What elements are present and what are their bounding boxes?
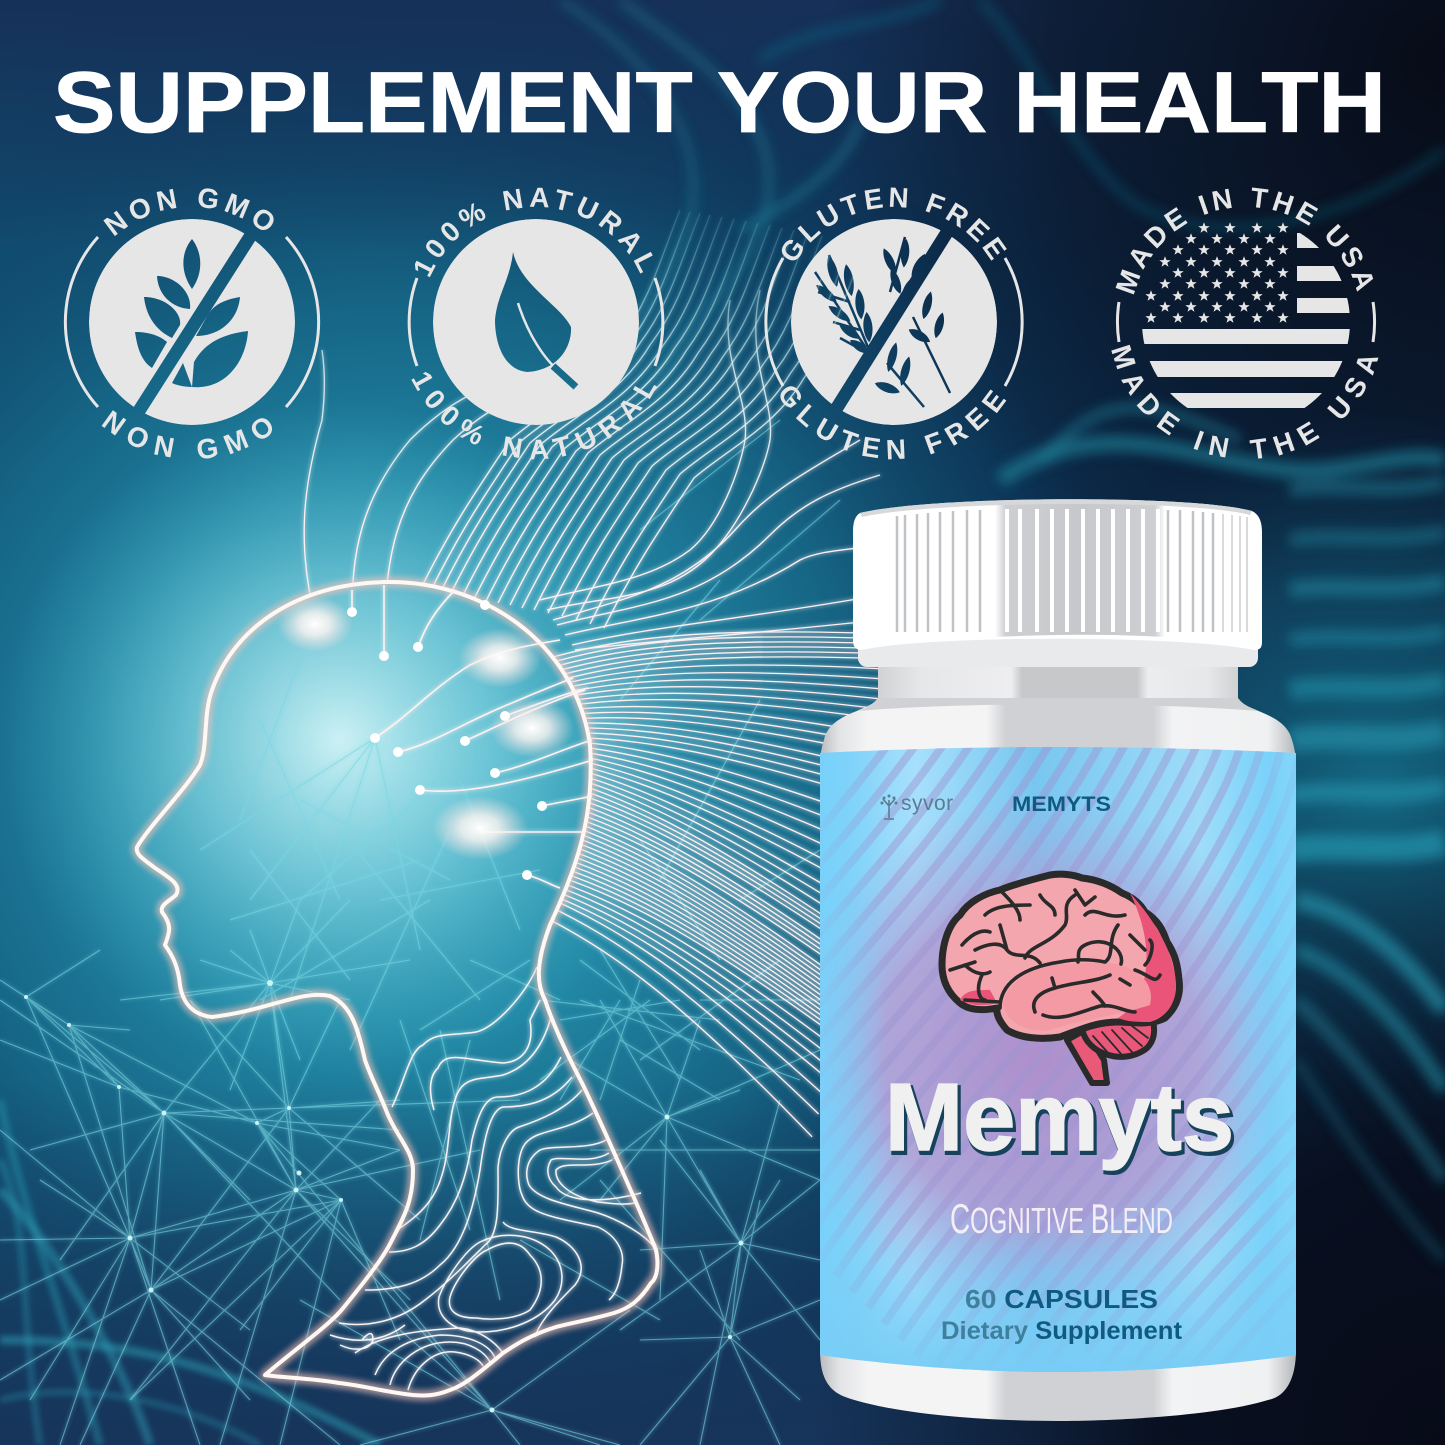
glowing light points: [277, 596, 574, 880]
label brand name: MEMYTS: [1012, 793, 1111, 816]
badge: non gmo: NON GMO: [103, 188, 274, 236]
capsule count: 60 CAPSULES: [965, 1284, 1158, 1314]
badge: non gmo: NON GMO: [102, 410, 272, 458]
title: SUPPLEMENT YOUR HEALTH: [53, 55, 1386, 151]
neck ring: [858, 625, 1258, 667]
badge: 100% natural: [408, 188, 664, 460]
bottle cap: [853, 499, 1262, 650]
dietary supplement: Dietary Supplement: [941, 1317, 1183, 1345]
badge: 100% natural: 100% NATURAL: [411, 372, 657, 460]
bottle neck: [878, 660, 1238, 700]
product label: [820, 747, 1296, 1372]
badge: made in the usa: MADE IN THE USA: [1111, 344, 1378, 459]
brand logo: syvor: [880, 792, 954, 819]
supplement bottle: [820, 499, 1296, 1421]
network nodes: [24, 980, 744, 1412]
badge: made in the usa: [1111, 188, 1378, 459]
blurred teal strands lower left: [0, 1100, 380, 1445]
product subtitle: COGNITIVE BLEND: [950, 1195, 1173, 1242]
flag stars: [1145, 222, 1289, 323]
head outline glowing silhouette: [137, 582, 657, 1395]
badge: gluten free: GLUTEN FREE: [780, 386, 1006, 460]
badge: gluten free: GLUTEN FREE: [782, 188, 1007, 261]
brain illustration: [942, 874, 1179, 1083]
brand logo: syvor: syvor: [901, 792, 954, 815]
bottle body: [820, 698, 1296, 1421]
neural network mesh: [0, 420, 840, 1445]
shoulder band: [858, 698, 1258, 711]
badge: non gmo: [64, 188, 320, 458]
badge: gluten free: [764, 188, 1024, 460]
flag stripes: [1140, 233, 1357, 408]
teal swirl waves: [560, 0, 1445, 1260]
badge: made in the usa: MADE IN THE USA: [1116, 188, 1374, 294]
inner brain rays: [352, 585, 593, 888]
badge: 100% natural: 100% NATURAL: [414, 188, 653, 278]
neck contour lines: [330, 967, 654, 1390]
product name: Memyts: [885, 1064, 1234, 1171]
fan of neural lines behind the head: [552, 628, 878, 1140]
product name: Memyts: [887, 1067, 1236, 1174]
upward neural lines: [304, 210, 880, 656]
